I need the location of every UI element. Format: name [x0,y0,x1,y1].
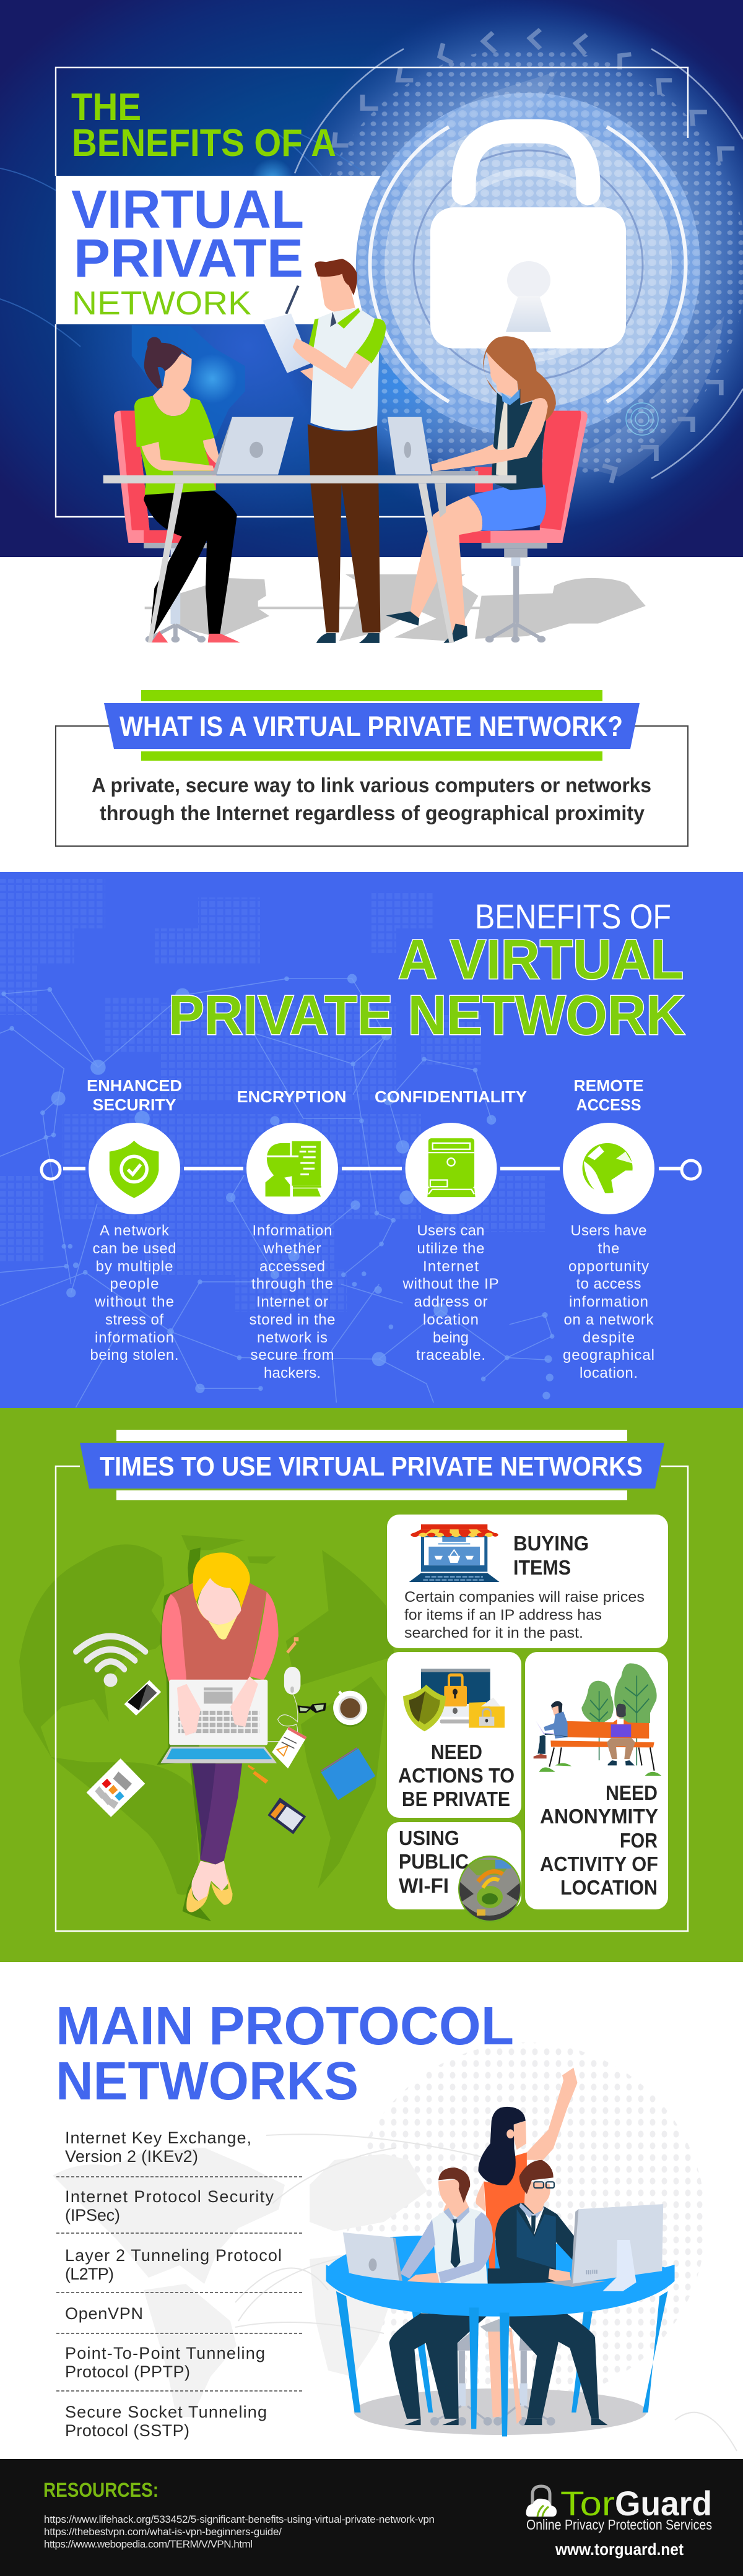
benefit: confidentiality [375,1087,527,1364]
resources: RESOURCES: [43,2479,159,2501]
TorGuard logo: Online Privacy Protection Services [526,2517,712,2533]
benefit: confidentiality: Users can [417,1222,484,1239]
heading ribbon [104,703,640,749]
white title band [56,176,381,324]
card: using public wifi [387,1822,521,1925]
benefits heading [168,897,685,1047]
table front [326,2265,675,2436]
card: need anonymity [525,1652,668,1909]
TorGuard logo [526,2484,712,2559]
monitor [545,2204,663,2291]
benefit: encryption: through the [251,1276,333,1292]
times to use heading: TIMES TO USE VIRTUAL PRIVATE NETWORKS [100,1451,643,1482]
icon: shield, monitor and locks [403,1669,505,1731]
protocol list: OpenVPN [65,2304,143,2323]
right man [495,2160,607,2425]
resources: https://thebestvpn.com/what-is-vpn-beginners-guide/ [44,2526,282,2538]
illustration: team at round table [326,2068,675,2436]
card: need anonymity: ACTIVITY OF [540,1852,658,1875]
benefits heading: PRIVATE NETWORK [168,985,685,1047]
icon: wifi [76,1636,146,1687]
icon: hacker at computer [266,1141,321,1196]
icon: shield [110,1141,159,1198]
benefit: confidentiality: Internet [423,1258,479,1275]
floor shadows [145,574,646,641]
card: using public wifi: PUBLIC [399,1850,469,1873]
icon: wifi roundabout [458,1856,521,1925]
icon: globe [583,1143,633,1194]
benefit: remote access: opportunity [568,1258,649,1275]
benefit: encryption: whether [263,1240,321,1257]
TorGuard logo: Guard [615,2484,712,2523]
benefit: remote access: location. [580,1365,638,1381]
benefit: encryption: network is [257,1329,328,1346]
resources: https://www.webopedia.com/TERM/V/VPN.html [44,2538,253,2550]
left chair [114,411,216,642]
protocol list: Layer 2 Tunneling Protocol [65,2246,282,2265]
times to use section background [0,1408,743,1962]
what is a VPN panel [56,690,688,846]
protocol list: (IPSec) [65,2206,120,2224]
benefits section background [0,872,743,1408]
green bars [141,690,602,761]
protocol list: Version 2 (IKEv2) [65,2147,198,2166]
hero title: VIRTUAL [71,179,304,240]
card: using public wifi: WI-FI [399,1874,449,1897]
left man [389,2168,493,2425]
hero rings and chevrons [295,30,743,483]
footer [0,2459,743,2576]
benefit: encryption: hackers. [264,1365,321,1381]
benefit: confidentiality: location [423,1312,479,1328]
desk [103,475,516,642]
benefit: confidentiality: being [433,1329,469,1346]
illustration: three people at a desk [103,259,588,643]
card: need actions to be private [387,1652,521,1818]
hero title: NETWORK [72,285,251,322]
icon: online shop [409,1524,500,1582]
resources [43,2479,435,2550]
card: need anonymity: NEED [606,1781,658,1804]
benefit: confidentiality: traceable. [416,1347,485,1364]
benefit: remote access: Users have [571,1222,646,1239]
protocol list: Internet Protocol Security [65,2187,274,2206]
heading ribbon: WHAT IS A VIRTUAL PRIVATE NETWORK? [119,711,623,742]
protocols heading [56,1996,514,2111]
benefit: encryption: ENCRYPTION [237,1087,347,1106]
table back legs [412,2310,593,2413]
definition text [92,774,651,824]
benefit: enhanced security: information [95,1329,174,1346]
TorGuard logo: Tor [560,2484,615,2523]
benefit: confidentiality: CONFIDENTIALITY [375,1087,527,1106]
icon: server [427,1138,476,1197]
icon: padlock [430,131,626,348]
protocol list: Secure Socket Tunneling [65,2403,267,2421]
benefit: remote access: the [598,1240,619,1257]
benefit: enhanced security: without the [94,1294,174,1310]
benefit: enhanced security: can be used [93,1240,176,1257]
world map on green [19,1535,394,1895]
left laptop [173,417,293,475]
benefit: enhanced security: being stolen. [90,1347,178,1364]
table back [326,2236,675,2285]
benefit: enhanced security: by multiple [95,1258,173,1275]
benefit: remote access [563,1076,654,1381]
card: need anonymity: ANONYMITY [540,1805,658,1828]
benefit: remote access: on a network [563,1312,654,1328]
card: need anonymity: LOCATION [560,1876,658,1899]
card: need actions to be private: BE PRIVATE [402,1787,510,1810]
benefits heading: A VIRTUAL [398,929,684,991]
phone [124,1680,161,1716]
chairs [430,2333,555,2426]
left woman [134,337,240,642]
benefit: confidentiality: without the IP [402,1276,499,1292]
benefit: encryption: secure from [250,1347,334,1364]
card: need anonymity: FOR [620,1829,658,1852]
card: need actions to be private: ACTIONS TO [398,1764,515,1787]
benefit: encryption [237,1087,347,1381]
benefit: enhanced security [87,1076,182,1364]
hero title: THE [71,86,141,129]
benefit: encryption: Information [253,1222,332,1239]
hero title: PRIVATE [74,228,303,288]
icon: people on park bench [534,1663,661,1776]
benefit: remote access: ACCESS [576,1096,641,1114]
definition text: through the Internet regardless of geographical proximity [100,802,645,824]
hero background [0,0,743,557]
benefit: enhanced security: stress of [105,1312,163,1328]
protocol list: Internet Key Exchange, [65,2129,251,2147]
card: buying items: searched for it in the past. [404,1625,583,1641]
floor shadow [354,2388,647,2435]
card: buying items [387,1515,668,1648]
woman [162,1552,279,1912]
protocol list: Protocol (PPTP) [65,2362,190,2381]
card: buying items: BUYING [513,1532,589,1555]
protocol list: Protocol (SSTP) [65,2421,189,2440]
benefit: enhanced security: people [110,1276,159,1292]
notepad, notebook, marker, calculator [248,1727,375,1834]
benefit: remote access: despite [583,1329,635,1346]
card: using public wifi: USING [399,1826,459,1849]
right woman [386,336,556,643]
benefits heading: BENEFITS OF [475,897,671,936]
laptop [160,1676,277,1763]
standing man [263,259,386,643]
benefit: remote access: geographical [563,1347,654,1364]
benefit: confidentiality: utilize the [417,1240,484,1257]
benefit: remote access: REMOTE [573,1076,644,1095]
left laptop [343,2232,433,2292]
card: need actions to be private: NEED [431,1740,482,1763]
benefit: confidentiality: address or [414,1294,488,1310]
benefit: encryption: stored in the [249,1312,336,1328]
TorGuard logo: www.torguard.net [555,2540,684,2559]
benefit: enhanced security: ENHANCED [87,1076,182,1095]
protocols heading: MAIN PROTOCOL [56,1996,514,2056]
protocols heading: NETWORKS [56,2051,358,2111]
definition box [56,726,688,846]
usb, mouse, glasses, coffee [267,1637,367,1742]
benefit: encryption: Internet or [256,1294,328,1310]
benefit: encryption: accessed [259,1258,325,1275]
icon: lock and cloud [526,2486,557,2517]
benefit: remote access: to access [576,1276,641,1292]
paper [87,1758,145,1817]
illustration: woman with laptop from above [76,1547,375,1921]
frame on green [56,1466,688,1931]
protocol list: (L2TP) [65,2265,114,2283]
card: buying items: ITEMS [513,1556,571,1579]
times to use heading [80,1430,664,1500]
card: buying items: for items if an IP address has [404,1607,602,1623]
standing woman [476,2068,577,2424]
timeline connector [41,1160,700,1179]
hero title [71,86,336,322]
resources: https://www.lifehack.org/533452/5-significant-benefits-using-virtual-private-network-vpn [44,2513,435,2525]
hero frame [56,67,688,517]
body shadow [157,1547,211,1921]
protocol list [56,2129,303,2440]
benefit: enhanced security: SECURITY [93,1096,176,1114]
benefit: enhanced security: A network [100,1222,170,1239]
right chair [457,411,588,642]
hero title: BENEFITS OF A [72,122,336,165]
protocol list: Point-To-Point Tunneling [65,2344,265,2362]
benefit: remote access: information [569,1294,648,1310]
card: buying items: Certain companies will raise prices [404,1589,645,1606]
protocols background: globe and map [53,2042,737,2451]
definition text: A private, secure way to link various computers or networks [92,774,651,797]
right laptop [388,417,478,475]
